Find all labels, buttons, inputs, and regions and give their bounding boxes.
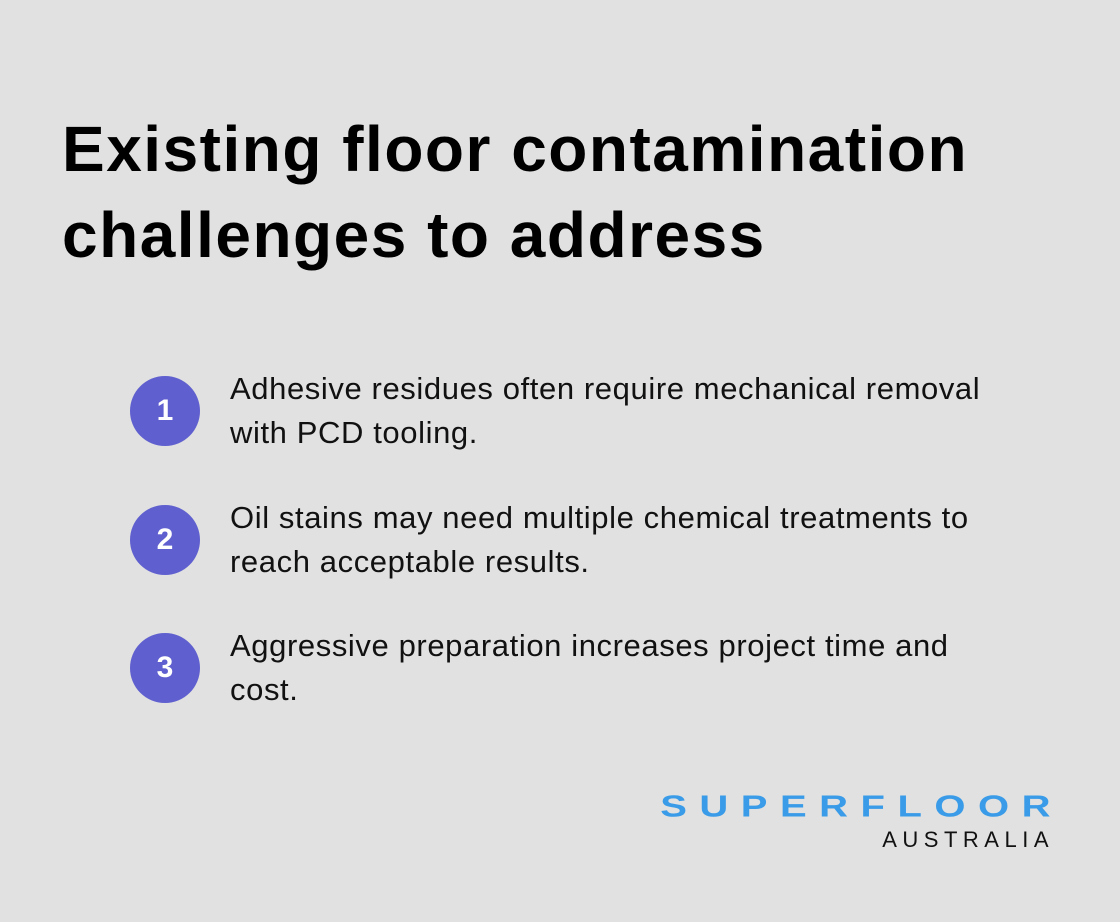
text 1: Adhesive residues often require mechanical removal with PCD tooling. <box>230 371 980 450</box>
logo wordmark: SUPERFLOOR <box>660 790 1063 823</box>
logo <box>660 790 1063 852</box>
title: Existing floor contamination <box>62 113 968 185</box>
item 2 <box>130 500 969 579</box>
number badge 3 <box>130 633 200 703</box>
title: challenges to address <box>62 199 766 271</box>
item 3 <box>130 628 949 707</box>
number badge 2 <box>130 505 200 575</box>
item 1 <box>130 371 980 450</box>
number badge 1 <box>130 376 200 446</box>
logo subtitle: AUSTRALIA <box>882 827 1054 852</box>
number badge 3: 3 <box>157 651 173 684</box>
text 3: Aggressive preparation increases project time and cost. <box>230 628 949 707</box>
title <box>62 113 968 271</box>
number badge 2: 2 <box>157 523 173 556</box>
number badge 1: 1 <box>157 394 173 427</box>
text 2: Oil stains may need multiple chemical treatments to reach acceptable results. <box>230 500 969 579</box>
